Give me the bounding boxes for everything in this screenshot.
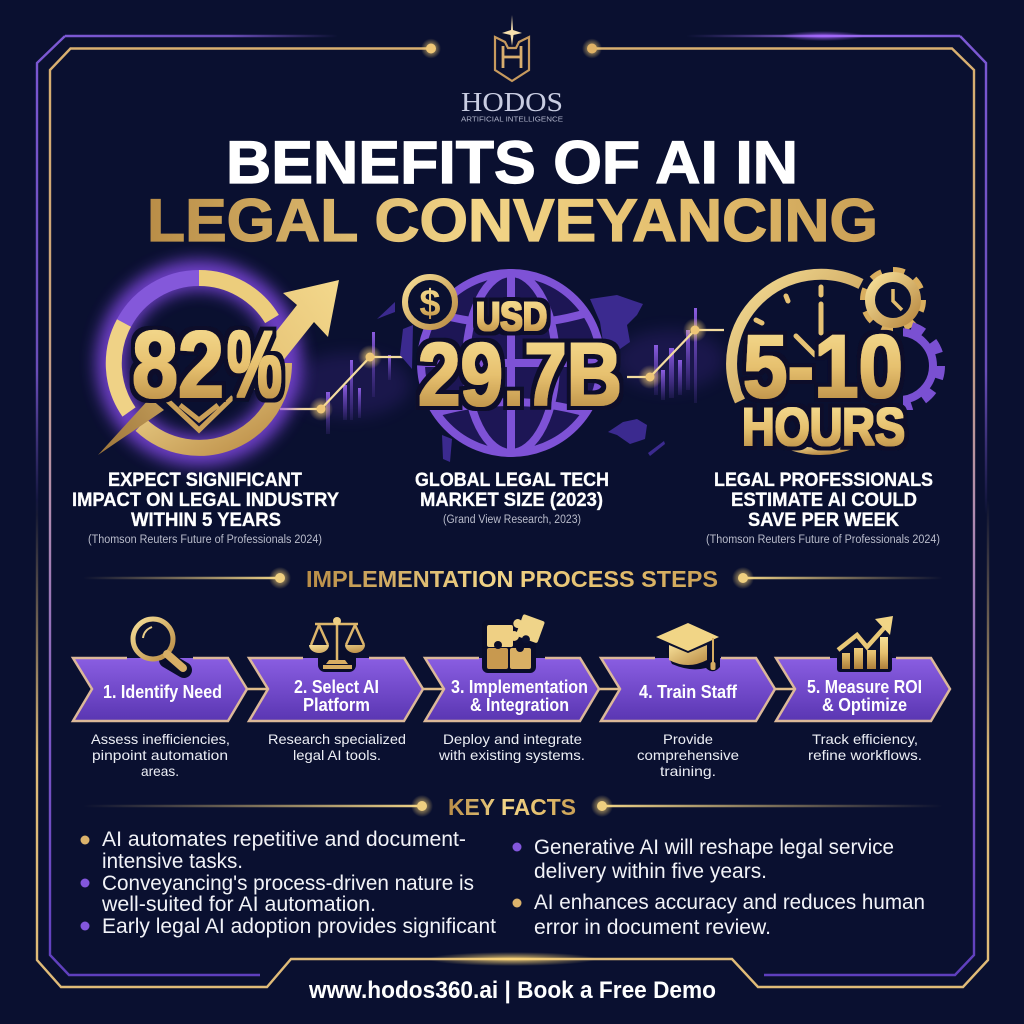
panel: hours saved stat <box>706 272 940 546</box>
fact 2 <box>80 871 474 916</box>
source note: (Thomson Reuters Future of Professionals 2024) <box>706 534 940 546</box>
logo tagline: ARTIFICIAL INTELLIGENCE <box>461 114 563 124</box>
step 3 label: & Integration <box>470 695 569 715</box>
hours label: HOURS <box>742 398 905 457</box>
fact 2: Conveyancing's process-driven nature is <box>102 871 474 895</box>
stat caption <box>72 469 339 531</box>
icon: scales of justice <box>309 617 365 672</box>
source note: (Thomson Reuters Future of Professionals 2024) <box>88 534 322 546</box>
stat caption: MARKET SIZE (2023) <box>420 489 603 511</box>
title line 2: LEGAL CONVEYANCING <box>147 187 878 254</box>
icon: gold gear <box>865 272 921 328</box>
icon: magnifying glass <box>133 619 184 670</box>
step 3 description: Deploy and integrate <box>443 731 582 747</box>
icon: dollar coin: $ <box>419 283 441 325</box>
fact 5: AI enhances accuracy and reduces human <box>534 890 925 914</box>
panel: step 4 <box>601 623 775 779</box>
connector chart 2 <box>615 308 725 403</box>
step 3 label: 3. Implementation <box>451 677 588 697</box>
logo <box>461 15 563 124</box>
source note: (Grand View Research, 2023) <box>443 514 581 526</box>
icon: globe <box>421 273 601 453</box>
fact 1: intensive tasks. <box>102 849 243 873</box>
panel: step 2 <box>249 617 423 763</box>
title line 1: BENEFITS OF AI IN <box>226 129 798 196</box>
step 2 label <box>294 677 379 715</box>
percent sign: % <box>227 312 282 418</box>
step 1 description: areas. <box>141 763 179 779</box>
stat caption: GLOBAL LEGAL TECH <box>415 469 609 491</box>
key facts: right column <box>512 835 925 939</box>
step 4 description: Provide <box>663 731 713 747</box>
icon: progress ring <box>111 275 287 451</box>
5-10 figure: 5-10 <box>743 316 903 416</box>
step 2 description: legal AI tools. <box>293 747 381 763</box>
step 5 description <box>808 731 922 763</box>
panel: 82 percent stat <box>72 275 339 546</box>
fact 4: delivery within five years. <box>534 859 767 883</box>
step 1 description <box>91 731 230 779</box>
step 4 description: comprehensive <box>637 747 739 763</box>
step connectors <box>247 688 796 690</box>
icon: logo shield <box>495 15 529 81</box>
icon: rising arrow <box>98 280 339 455</box>
heading: key facts: KEY FACTS <box>448 794 576 820</box>
stat caption: LEGAL PROFESSIONALS <box>714 469 933 491</box>
stat caption <box>714 469 933 531</box>
step 3 description: with existing systems. <box>438 747 585 763</box>
chevron 3 <box>425 658 599 721</box>
step 5 label <box>807 677 922 715</box>
icon: growth chart <box>837 616 893 672</box>
fact 2: well-suited for AI automation. <box>101 892 376 916</box>
panel: step 3 <box>425 612 599 763</box>
logo wordmark: HODOS <box>461 87 563 117</box>
step 4 label: 4. Train Staff <box>639 682 738 702</box>
fact 1: AI automates repetitive and document- <box>102 827 466 851</box>
fact 4: Generative AI will reshape legal service <box>534 835 894 859</box>
stat caption: IMPACT ON LEGAL INDUSTRY <box>72 489 339 511</box>
fact 4 <box>512 835 894 883</box>
icon: graduation cap <box>656 623 720 671</box>
connector chart 1 <box>280 332 412 434</box>
step 2 description: Research specialized <box>268 731 406 747</box>
icon: world map <box>377 295 665 462</box>
step 1 label: 1. Identify Need <box>103 682 222 702</box>
panel: step 5 <box>776 616 950 763</box>
stat caption <box>415 469 609 511</box>
icon: chevron mark <box>167 397 233 430</box>
29.7B figure: 29.7B <box>418 324 622 424</box>
fact 5 <box>512 890 925 939</box>
step 4 description: training. <box>660 763 716 779</box>
icon: clock <box>732 274 861 451</box>
82 figure: 82 <box>132 312 224 418</box>
step 4 description <box>637 731 739 779</box>
chevron 4 <box>601 658 775 721</box>
title <box>147 129 878 254</box>
key facts: left column <box>80 827 496 938</box>
panel: step 1 <box>73 619 247 779</box>
stat caption: ESTIMATE AI COULD <box>731 489 917 511</box>
chevron 1 <box>73 658 247 721</box>
step 5 label: 5. Measure ROI <box>807 677 922 697</box>
fact 5: error in document review. <box>534 915 771 939</box>
step 2 description <box>268 731 406 763</box>
step 3 label <box>451 677 588 715</box>
USD label: USD <box>476 295 547 339</box>
heading: implementation process steps <box>83 566 943 592</box>
chevron 2 <box>249 658 423 721</box>
step 3 description <box>438 731 585 763</box>
heading: key facts <box>83 794 943 820</box>
fact 3: Early legal AI adoption provides significant <box>102 914 496 938</box>
stat caption: EXPECT SIGNIFICANT <box>108 469 302 491</box>
step 2 label: 2. Select AI <box>294 677 379 697</box>
icon: purple gear <box>903 322 945 410</box>
step 5 description: refine workflows. <box>808 747 922 763</box>
step 5 description: Track efficiency, <box>812 731 918 747</box>
chevron 5 <box>776 658 950 721</box>
step 1 description: Assess inefficiencies, <box>91 731 230 747</box>
stat caption: SAVE PER WEEK <box>748 509 899 531</box>
fact 1 <box>80 827 466 873</box>
panel: market size stat <box>377 273 665 526</box>
stat caption: WITHIN 5 YEARS <box>131 509 281 531</box>
footer call to action: www.hodos360.ai | Book a Free Demo <box>308 977 716 1004</box>
icon: puzzle pieces <box>482 612 545 673</box>
step 5 label: & Optimize <box>822 695 907 715</box>
icon: dollar coin <box>405 277 455 327</box>
step 1 description: pinpoint automation <box>92 747 228 763</box>
heading: implementation process steps: IMPLEMENTATION PROCESS STEPS <box>306 566 718 592</box>
step 2 label: Platform <box>303 695 370 715</box>
